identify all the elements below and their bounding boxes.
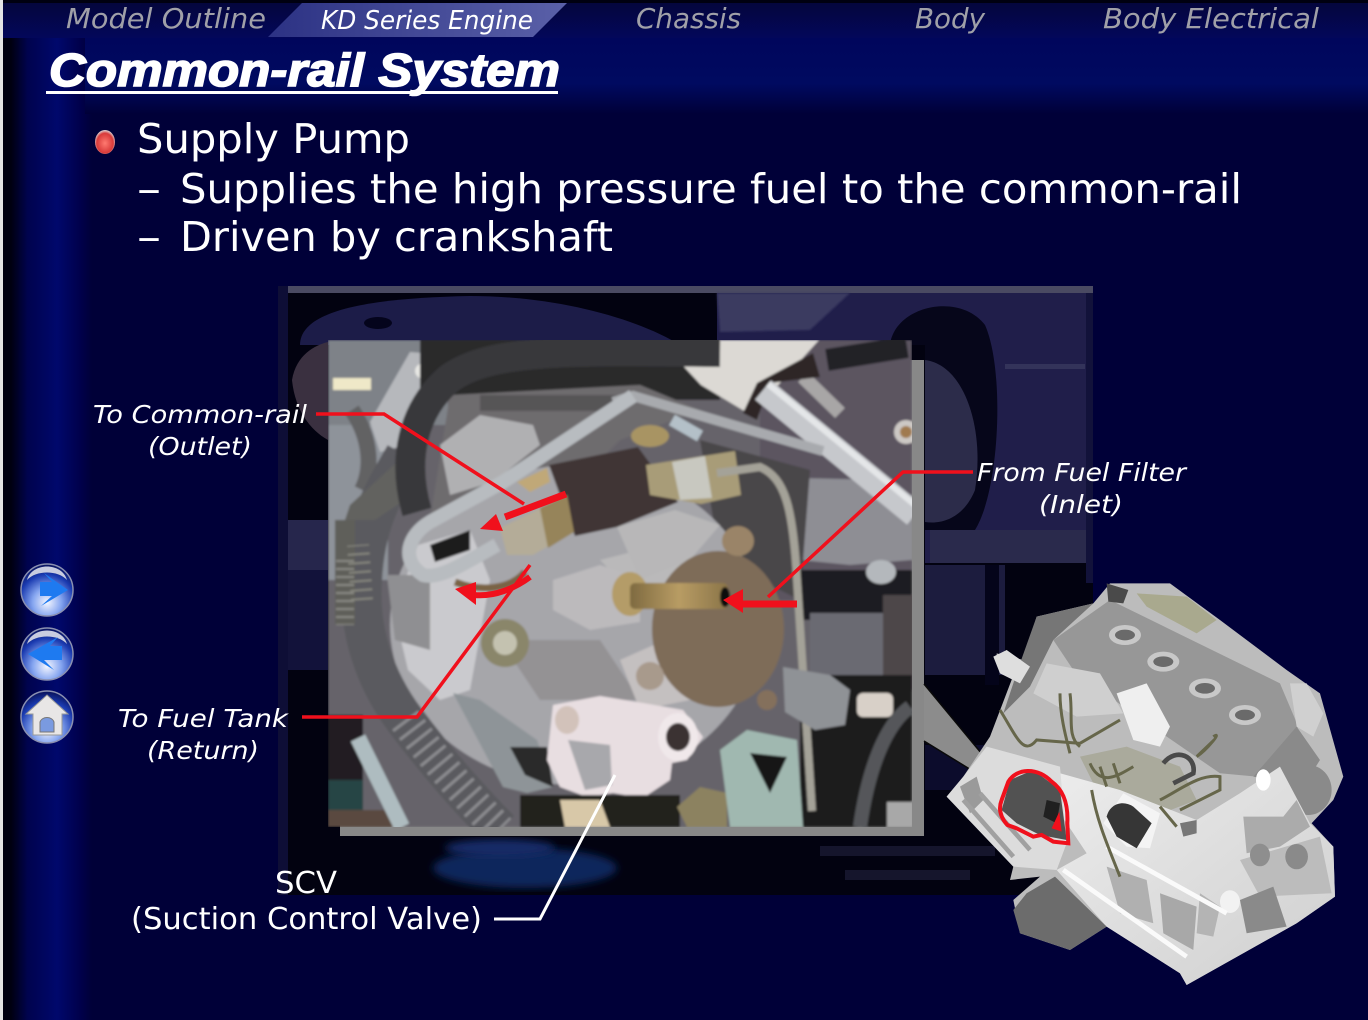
intake and upper parts: [993, 650, 1030, 683]
label: to common-rail: [93, 400, 307, 461]
silver pipes: [613, 396, 823, 451]
engine silhouette: [947, 583, 1343, 985]
sub-bullet: supplies high pressure fuel: –: [137, 165, 161, 213]
label: SCV with leader: SCV: [275, 866, 337, 901]
photo drop shadow: [340, 360, 924, 836]
sub-bullet: driven by crankshaft: –: [137, 213, 161, 261]
label: to common-rail: To Common-rail: [93, 400, 307, 429]
sub-bullet: supplies high pressure fuel: Supplies the high pressure fuel to the common-rail: [180, 165, 1242, 213]
tab: KD Series Engine: KD Series Engine: [321, 6, 533, 36]
lower right: [800, 570, 912, 620]
ignition wells: [1109, 625, 1141, 645]
tab: Model Outline: Model Outline: [66, 2, 266, 35]
disc and nipple: [652, 551, 784, 707]
label: SCV with leader: (Suction Control Valve): [131, 902, 482, 937]
upper right: [760, 340, 912, 600]
label: to fuel tank: To Fuel Tank: [118, 704, 290, 733]
label: to fuel tank: (Return): [147, 736, 259, 765]
label: to common-rail: (Outlet): [148, 432, 252, 461]
bullet: Supply Pump: Supply Pump: [137, 115, 410, 163]
oil pan: [1013, 877, 1107, 950]
nav button: back: [21, 628, 73, 680]
brass fittings: [517, 468, 550, 492]
lower-left: [328, 714, 364, 782]
supply pump location: [1002, 770, 1067, 840]
mounting bolt: [481, 619, 529, 667]
callout wedge to engine: [924, 684, 1020, 800]
icon: red bullet: [95, 130, 115, 154]
SCV: [547, 696, 703, 798]
brown housing: [549, 447, 678, 536]
cylinder head cover: [1053, 600, 1298, 777]
red leader and flow arrows: [302, 414, 973, 717]
nav button: home: [21, 691, 73, 743]
label: SCV with leader: [131, 775, 615, 937]
fuel pipes: [1000, 693, 1220, 877]
lower parts: [520, 795, 680, 827]
bullet text block: [95, 115, 1242, 261]
tab: Body Electrical: Body Electrical: [1103, 2, 1319, 35]
illustration: KD series engine: [947, 583, 1343, 985]
thin inlet line: [717, 467, 812, 811]
photo of supply pump: [328, 340, 918, 830]
arrow: to fuel tank: [302, 565, 530, 717]
label: from fuel filter: From Fuel Filter: [977, 458, 1188, 487]
tab: Body: Body: [915, 2, 985, 35]
navigation bar: [66, 2, 1319, 37]
panel: darkened car backdrop: [278, 286, 1093, 895]
block ribs: [1107, 867, 1153, 923]
oil filter: [1103, 793, 1160, 848]
arrow: from fuel filter: [723, 472, 973, 613]
panel: engine bay photograph: [328, 340, 1020, 836]
label: from fuel filter: (Inlet): [1039, 490, 1123, 519]
engine block: [1057, 767, 1335, 985]
title: Common-rail System: [49, 44, 560, 96]
nav button: forward: [21, 564, 73, 616]
label: from fuel filter: [977, 458, 1188, 519]
active tab highlight: [268, 3, 567, 37]
arrow: to common-rail: [316, 414, 566, 531]
label: to fuel tank: [118, 704, 290, 765]
hose top: [410, 351, 720, 512]
corrugated hoses: [352, 410, 369, 490]
tab: Chassis: Chassis: [636, 2, 741, 35]
pump body: [390, 465, 760, 785]
sub-bullet: driven by crankshaft: Driven by crankshaft: [180, 213, 613, 261]
red outline around pump: [1000, 771, 1068, 843]
